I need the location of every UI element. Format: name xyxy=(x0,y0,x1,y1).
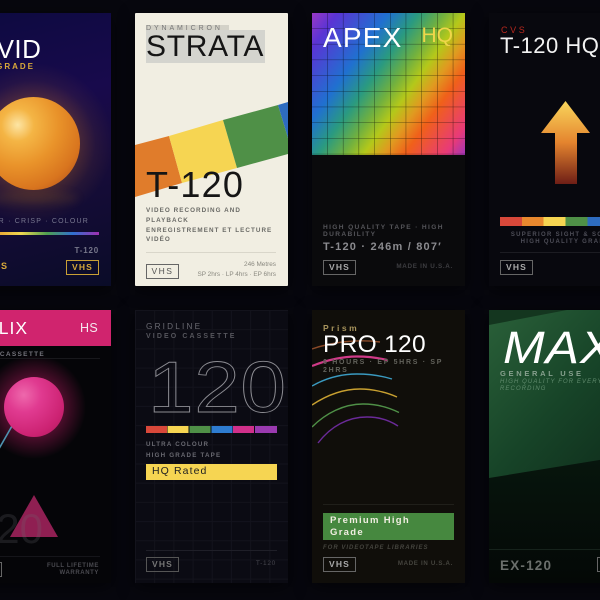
model number: T-120 xyxy=(75,246,99,254)
description xyxy=(146,207,272,243)
panel: Prism PRO 120 cassette xyxy=(312,310,465,583)
title: T-120 HQ xyxy=(500,33,599,58)
specs: 246 Metres xyxy=(244,261,276,268)
title: PRO 120 xyxy=(323,331,426,358)
HQ label: HQ xyxy=(422,24,453,47)
green sheen xyxy=(489,310,600,478)
panel: CVS T-120 HQ cassette xyxy=(489,13,600,286)
title: APEX xyxy=(323,22,403,53)
specs xyxy=(197,261,276,278)
tagline: HIGH QUALITY TAPE · HIGH xyxy=(323,224,444,231)
description: HIGH GRADE TAPE xyxy=(146,452,221,459)
description: VIDEO RECORDING AND xyxy=(146,207,241,214)
VHS badge: VHS xyxy=(506,262,527,272)
panel: VIVID cassette xyxy=(0,13,111,286)
title: STRATA xyxy=(146,30,264,63)
rating band xyxy=(146,464,277,480)
VHS badge xyxy=(500,260,533,275)
VHS badge xyxy=(323,557,356,572)
origin: MADE IN U.S.A. xyxy=(396,263,453,270)
model: EX-120 xyxy=(500,558,552,573)
model spec: T-120 · 246m / 807′ xyxy=(323,241,442,253)
icon: prism arcs xyxy=(312,340,400,444)
specs xyxy=(323,359,443,374)
VHS badge xyxy=(146,557,179,572)
VHS badge xyxy=(323,260,356,275)
panel: GRIDLINE cassette xyxy=(135,310,288,583)
grade band xyxy=(323,513,454,540)
description: ULTRA COLOUR xyxy=(146,441,209,448)
warranty: FULL LIFETIME xyxy=(47,563,99,569)
warranty: WARRANTY xyxy=(60,570,99,576)
description: ENREGISTREMENT ET LECTURE xyxy=(146,227,272,234)
description xyxy=(500,378,600,392)
description xyxy=(146,441,221,459)
icon: pink sphere xyxy=(4,377,64,437)
rating band: HQ Rated xyxy=(152,465,208,477)
description: PLAYBACK xyxy=(146,217,189,224)
grade band: Premium High xyxy=(330,514,410,526)
tagline xyxy=(323,224,444,238)
VHS badge xyxy=(146,264,179,279)
VHS badge: VHS xyxy=(72,262,93,272)
subtitle: GENERAL USE xyxy=(500,368,584,378)
icon: orange sphere xyxy=(0,97,80,190)
colour bar xyxy=(146,426,277,433)
tagline: DURABILITY xyxy=(323,231,376,238)
specs: SP 2hrs · LP 4hrs · EP 6hrs xyxy=(197,270,276,278)
grade band: Grade xyxy=(330,526,364,538)
sphere glow xyxy=(0,63,113,223)
tagline xyxy=(511,232,600,245)
brand: Prism xyxy=(323,322,359,332)
panel: STRATA cassette xyxy=(135,13,288,286)
specs: 6 HOURS · EP 5HRS · SP xyxy=(323,359,443,366)
subtitle: VIDEO CASSETTE xyxy=(146,333,236,340)
VHS badge xyxy=(66,260,99,275)
icon: arrow xyxy=(541,101,590,184)
panel: MAX cassette xyxy=(489,310,600,583)
note: FOR VIDEOTAPE LIBRARIES xyxy=(323,544,429,550)
panel: APEX cassette xyxy=(312,13,465,286)
sphere reflection xyxy=(0,191,78,205)
header band xyxy=(0,310,111,346)
VHS badge: VHS xyxy=(152,266,173,276)
HS label: HS xyxy=(80,320,98,334)
rainbow bar xyxy=(0,232,99,234)
icon: blue line xyxy=(0,426,12,448)
brand: GRIDLINE xyxy=(146,322,202,331)
rainbow grid xyxy=(312,13,465,155)
specs: 2HRS xyxy=(323,367,348,374)
icon: triangle xyxy=(10,495,58,537)
brand line: DYNAMICRON xyxy=(146,25,223,32)
model number: T-120 xyxy=(146,164,244,205)
origin: MADE IN U.S.A. xyxy=(398,560,453,567)
VHS badge: VHS xyxy=(329,559,350,569)
VHS badge: VHS xyxy=(329,262,350,272)
description: RECORDING xyxy=(500,386,547,392)
VHS badge xyxy=(0,562,2,577)
warranty xyxy=(47,562,99,576)
VHS badge: VHS xyxy=(152,559,173,569)
sphere glow xyxy=(0,355,86,459)
brand: CVS xyxy=(501,24,527,34)
rainbow bar xyxy=(500,217,600,226)
description: VIDÉO xyxy=(146,236,171,243)
VHS badge xyxy=(597,557,600,572)
colour stripes xyxy=(135,102,288,197)
panel: FLIX cassette xyxy=(0,310,111,583)
model: T-120 xyxy=(256,560,276,567)
